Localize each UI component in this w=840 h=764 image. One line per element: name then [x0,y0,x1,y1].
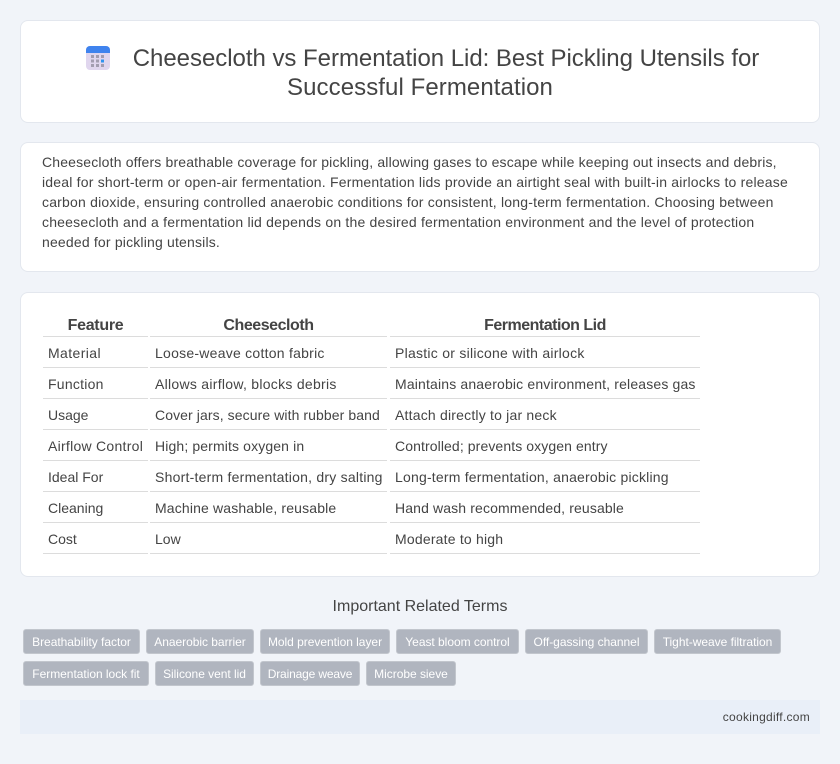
comparison table: Plastic or silicone with airlock [395,345,585,361]
comparison table: Airflow Control [48,438,143,454]
comparison table: Moderate to high [395,531,503,547]
comparison table: Material [48,345,101,361]
comparison table: Cost [48,531,77,547]
tags: related terms: Fermentation lock fit [32,667,140,681]
tags: related terms: Drainage weave [268,667,352,681]
comparison table: Long-term fermentation, anaerobic pickling [395,469,669,485]
intro text: Cheesecloth offers breathable coverage for pickling, allowing gases to escape while keeping out insects and debris, [42,154,777,170]
intro text: ideal for short-term or open-air fermentation. Fermentation lids provide an airtight seal with built-in airlocks to release [42,174,788,190]
comparison table: Feature [68,317,123,334]
heading: related terms: Important Related Terms [333,598,507,615]
comparison table: Cheesecloth [223,317,314,334]
tags: related terms: Microbe sieve [374,667,448,681]
footer bar [20,700,820,734]
comparison table: Low [155,531,181,547]
comparison table: Machine washable, reusable [155,500,336,516]
tags: related terms: Mold prevention layer [268,635,382,649]
title: Successful Fermentation [287,74,553,101]
comparison table: Fermentation Lid [484,317,606,334]
title card [20,20,820,123]
tags: related terms: Breathability factor [32,635,131,649]
comparison table: Loose-weave cotton fabric [155,345,325,361]
comparison table: Cover jars, secure with rubber band [155,407,380,423]
intro text: cheesecloth and a fermentation lid depends on the desired fermentation environment and the level of protection [42,214,754,230]
footer credit: cookingdiff.com [723,710,810,724]
comparison table: Short-term fermentation, dry salting [155,469,383,485]
comparison table: Function [48,376,104,392]
comparison table: Usage [48,407,88,423]
comparison table: Ideal For [48,469,103,485]
tags: related terms: Off-gassing channel [534,635,639,649]
comparison table: High; permits oxygen in [155,438,304,454]
comparison table: Controlled; prevents oxygen entry [395,438,608,454]
intro text [42,154,788,250]
panel: comparison table [20,292,820,577]
comparison table: Allows airflow, blocks debris [155,376,337,392]
comparison table: Cleaning [48,500,103,516]
icon: calendar [86,46,110,70]
title: Cheesecloth vs Fermentation Lid: Best Pickling Utensils for [133,45,759,72]
panel: intro text [20,142,820,272]
intro text: carbon dioxide, ensuring controlled anaerobic conditions for consistent, long-term fermentation. Choosing between [42,194,774,210]
comparison table: Maintains anaerobic environment, releases gas [395,376,696,392]
title [133,45,759,101]
comparison table: Hand wash recommended, reusable [395,500,624,516]
tags: related terms: Yeast bloom control [405,635,510,649]
tags: related terms: Tight-weave filtration [663,635,772,649]
comparison table: Attach directly to jar neck [395,407,557,423]
tags: related terms: Anaerobic barrier [154,635,246,649]
tags: related terms: Silicone vent lid [163,667,246,681]
intro text: needed for pickling utensils. [42,234,220,250]
